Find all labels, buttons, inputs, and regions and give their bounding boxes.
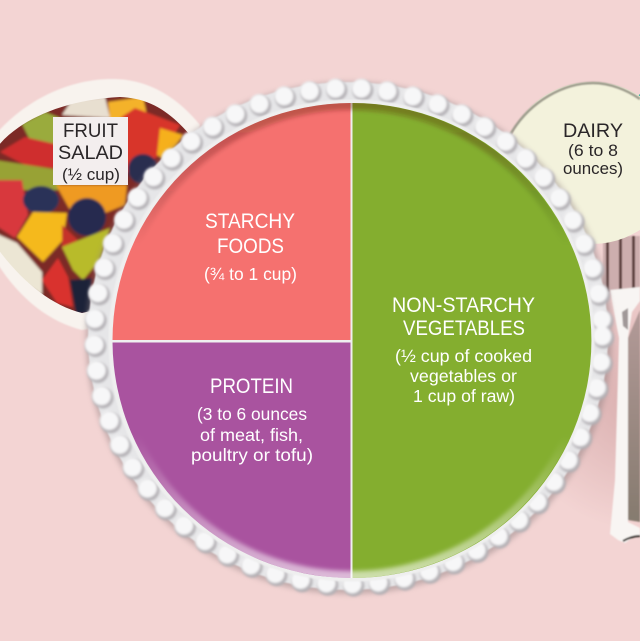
text: vegetables label: vegetables or [410, 366, 517, 386]
text: starchy foods label: STARCHY [205, 209, 295, 233]
text: vegetables label [392, 293, 535, 406]
icon: fruit salad bowl [0, 79, 200, 330]
panel: protein [112, 342, 350, 578]
text: vegetables label: VEGETABLES [403, 316, 525, 340]
icon: dairy glass [507, 82, 640, 244]
text: dairy label: (6 to 8 [568, 141, 618, 160]
text: dairy label [563, 120, 623, 178]
text: protein label [191, 374, 313, 465]
text: dairy label: ounces) [563, 159, 623, 178]
plate [86, 82, 612, 594]
text: protein label: of meat, fish, [200, 425, 303, 445]
icon: fork [603, 236, 640, 543]
text: vegetables label: (½ cup of cooked [395, 346, 532, 366]
callout: fruit salad label: SALAD [58, 142, 123, 164]
text: starchy foods label [204, 209, 297, 284]
text: starchy foods label: FOODS [217, 234, 284, 258]
text: protein label: (3 to 6 ounces [197, 404, 307, 424]
text: vegetables label: NON-STARCHY [392, 293, 535, 317]
callout: fruit salad label: FRUIT [63, 120, 118, 142]
panel: starchy foods [112, 103, 350, 340]
text: vegetables label: 1 cup of raw) [413, 386, 515, 406]
text: starchy foods label: (¾ to 1 cup) [204, 264, 297, 284]
callout: fruit salad label [53, 117, 128, 185]
callout: fruit salad label: (½ cup) [62, 165, 120, 184]
text: protein label: poultry or tofu) [191, 445, 313, 465]
panel: non-starchy vegetables [352, 103, 591, 578]
text: protein label: PROTEIN [210, 374, 293, 398]
text: dairy label: DAIRY [563, 120, 623, 142]
